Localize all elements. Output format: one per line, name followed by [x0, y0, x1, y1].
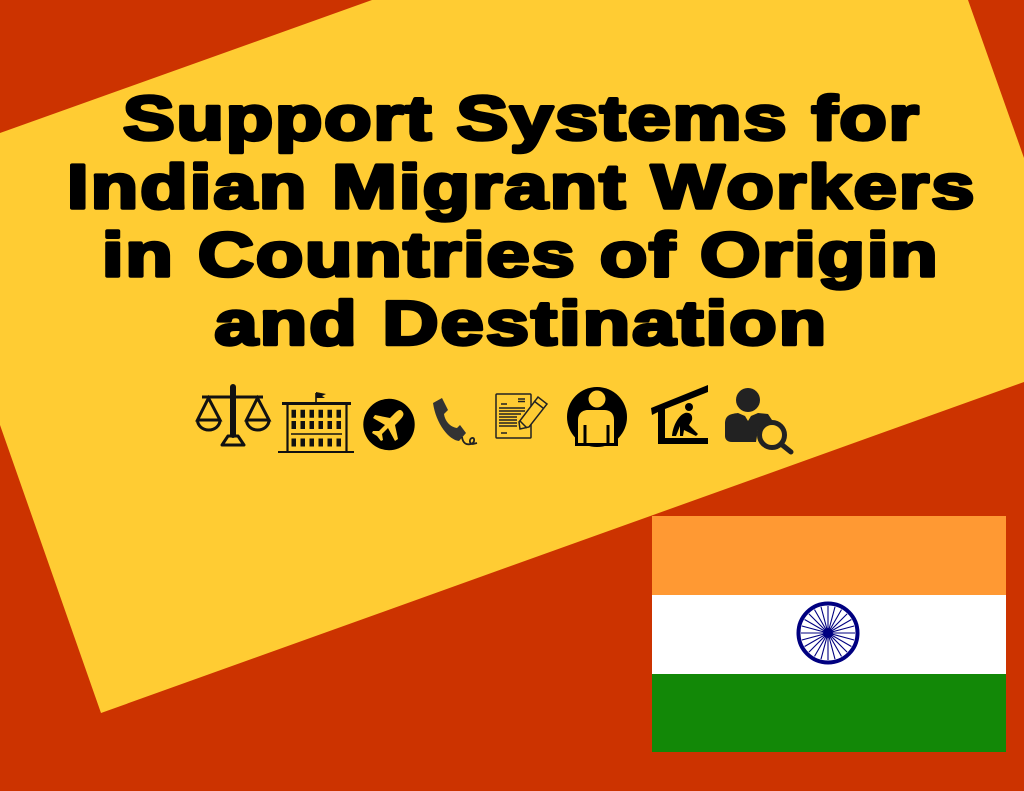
green band: [652, 674, 1006, 752]
title: Support Systems for: [123, 83, 921, 153]
white band: [652, 595, 1006, 674]
icon: document and pencil: [496, 394, 547, 438]
icon: person in dark circle: [567, 387, 627, 447]
ashoka chakra: [798, 604, 858, 662]
icon: person under shelter: [651, 385, 708, 444]
title: in Countries of Origin: [102, 219, 939, 289]
title: [67, 83, 977, 358]
icon: scales of justice: [198, 387, 269, 445]
saffron band: [652, 516, 1006, 595]
icon: telephone handset: [433, 398, 477, 444]
icon: office building: [278, 392, 354, 452]
icon row: [198, 385, 791, 452]
icon: person with magnifying glass: [725, 388, 791, 452]
title: and Destination: [214, 288, 828, 358]
flag of India: [652, 516, 1006, 752]
title: Indian Migrant Workers: [67, 151, 977, 221]
icon: airplane in circle: [363, 399, 415, 450]
